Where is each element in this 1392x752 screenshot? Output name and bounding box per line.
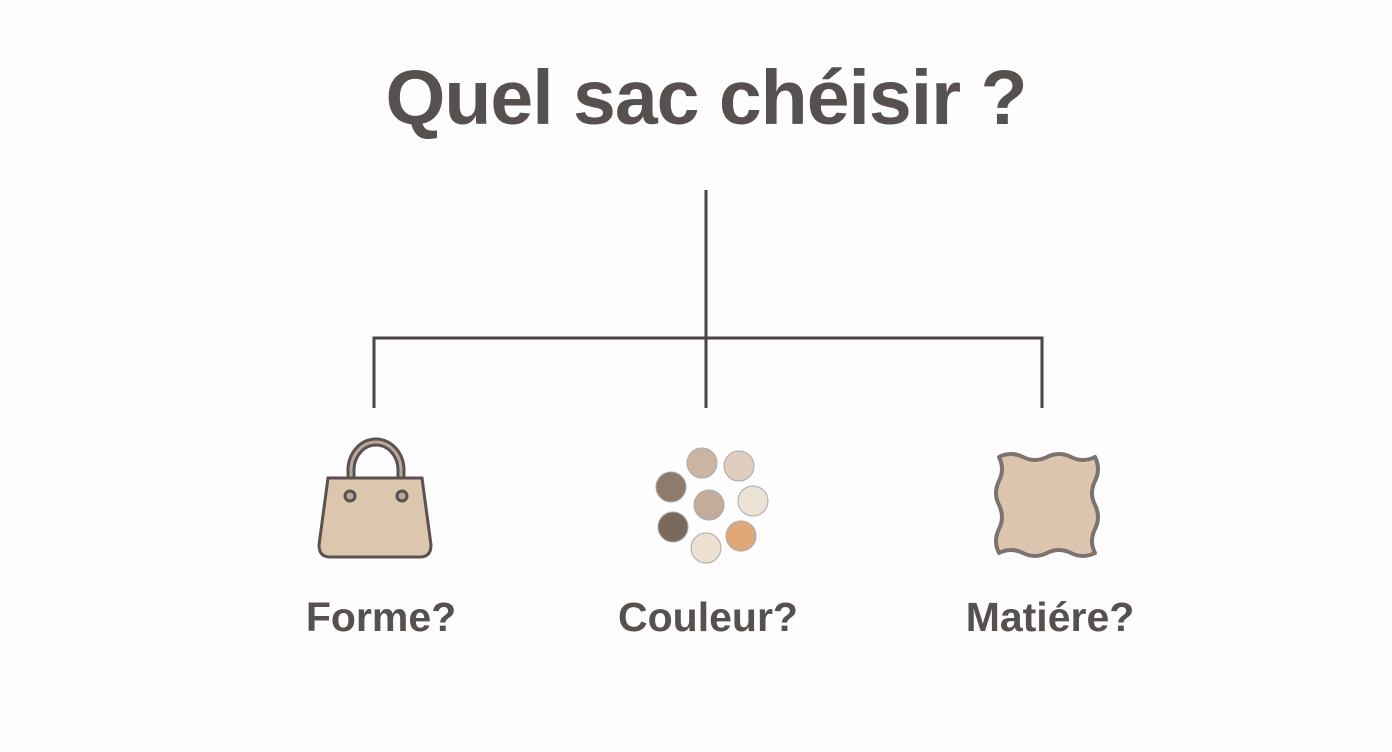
label: matiere: Matiére? bbox=[966, 594, 1134, 640]
icon: fabric bbox=[996, 454, 1098, 556]
title: Quel sac chéisir ? bbox=[385, 55, 1027, 141]
label: forme: Forme? bbox=[306, 594, 456, 640]
connector lines bbox=[374, 190, 1042, 408]
icon: color swatches bbox=[656, 448, 768, 563]
label: couleur: Couleur? bbox=[618, 594, 798, 640]
icon: bag bbox=[319, 442, 431, 557]
